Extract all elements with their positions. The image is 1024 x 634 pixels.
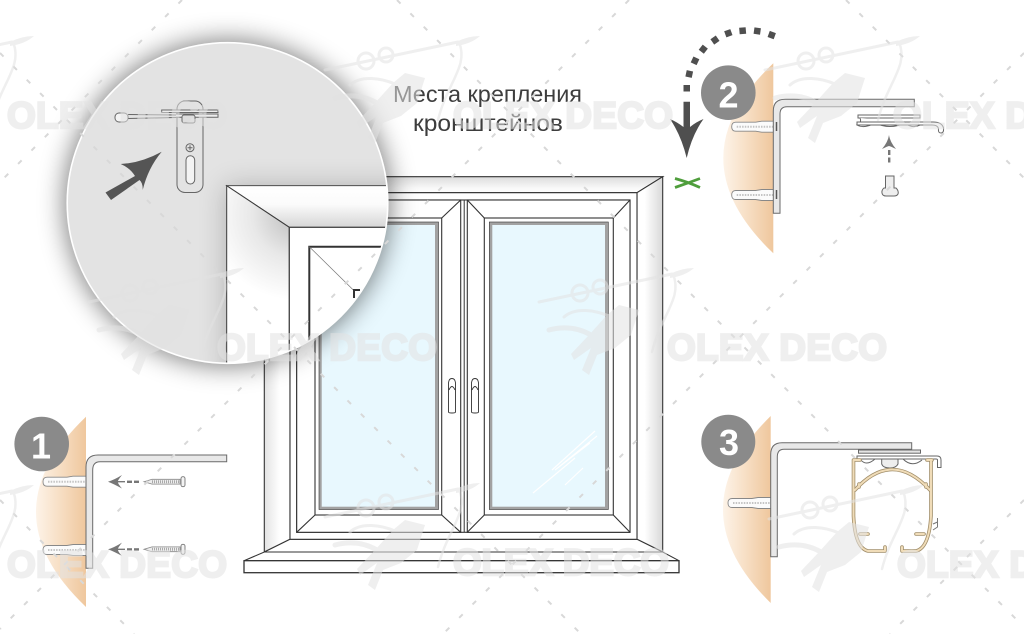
watermark top left — [0, 36, 227, 143]
heading: кронштейнов — [413, 110, 563, 136]
watermark top left: OLEX DECO — [7, 95, 227, 136]
dashed arrow top — [108, 475, 139, 488]
arrow down — [670, 102, 704, 158]
curtain track profile outline — [854, 460, 932, 551]
wall section — [723, 63, 773, 253]
wall plug top — [732, 121, 776, 132]
watermark middle right: OLEX DECO — [667, 327, 887, 368]
screw top — [144, 477, 185, 487]
dotted curved arrow — [670, 27, 776, 158]
left window handle — [448, 378, 456, 413]
watermark middle left: OLEX DECO — [217, 327, 437, 368]
panel: step 3 — [701, 415, 941, 603]
number badge 3 — [701, 415, 755, 469]
panel: step 2 — [701, 63, 944, 253]
watermark top right — [765, 36, 1024, 143]
watermark bottom left: OLEX DECO — [7, 544, 227, 585]
central mullion — [463, 200, 465, 532]
number badge 2 — [701, 65, 756, 120]
wall section — [723, 416, 771, 603]
wall plug bottom — [43, 544, 87, 556]
green mounting mark — [675, 178, 700, 188]
window sill — [244, 552, 679, 573]
carrier — [857, 115, 944, 133]
dashed arrow up — [882, 135, 896, 162]
lens rim — [67, 43, 388, 363]
bracket — [771, 443, 912, 557]
window illustration — [244, 177, 679, 573]
heading — [393, 81, 582, 136]
glass reflection — [533, 431, 597, 493]
soft corner shading — [226, 186, 416, 376]
bracket — [773, 99, 914, 213]
watermark bottom center: OLEX DECO — [453, 542, 669, 583]
bracket — [86, 455, 227, 568]
magnifier lens detail — [60, 40, 416, 376]
dotted arc — [684, 27, 776, 91]
number badge 2: 2 — [718, 74, 739, 115]
watermark middle left — [89, 268, 437, 375]
window reveal — [264, 177, 663, 552]
number badge 1 — [14, 417, 69, 471]
lens arrow — [106, 152, 162, 200]
dashed arrow bottom — [108, 543, 139, 556]
right window handle — [472, 378, 478, 413]
wall plug bottom — [732, 190, 776, 200]
wall section — [36, 417, 86, 607]
wall plug top — [43, 476, 87, 487]
heading: Места крепления — [393, 81, 582, 107]
panel: step 1 — [14, 417, 227, 607]
window frame — [290, 193, 637, 539]
lens shadow — [64, 40, 390, 366]
inner frame corner — [308, 246, 382, 340]
bracket front view — [115, 101, 218, 192]
bolt — [882, 176, 898, 196]
left sash — [297, 200, 461, 532]
number badge 3: 3 — [719, 422, 739, 463]
screw heads — [776, 122, 778, 199]
watermark middle right — [539, 268, 887, 375]
watermark bottom left — [0, 485, 227, 592]
track side clip — [933, 518, 938, 530]
watermark top center — [325, 36, 673, 143]
reveal corner — [227, 186, 399, 370]
lens content — [68, 44, 387, 362]
carrier — [857, 450, 941, 468]
watermark top center: OLEX DECO — [453, 95, 673, 136]
right sash — [467, 200, 630, 532]
curtain track profile fill — [854, 460, 932, 551]
screw bottom — [144, 544, 185, 554]
watermark bottom center — [325, 483, 669, 590]
wall plug — [728, 498, 772, 508]
number badge 1: 1 — [31, 426, 51, 466]
watermark bottom right — [769, 485, 1024, 592]
